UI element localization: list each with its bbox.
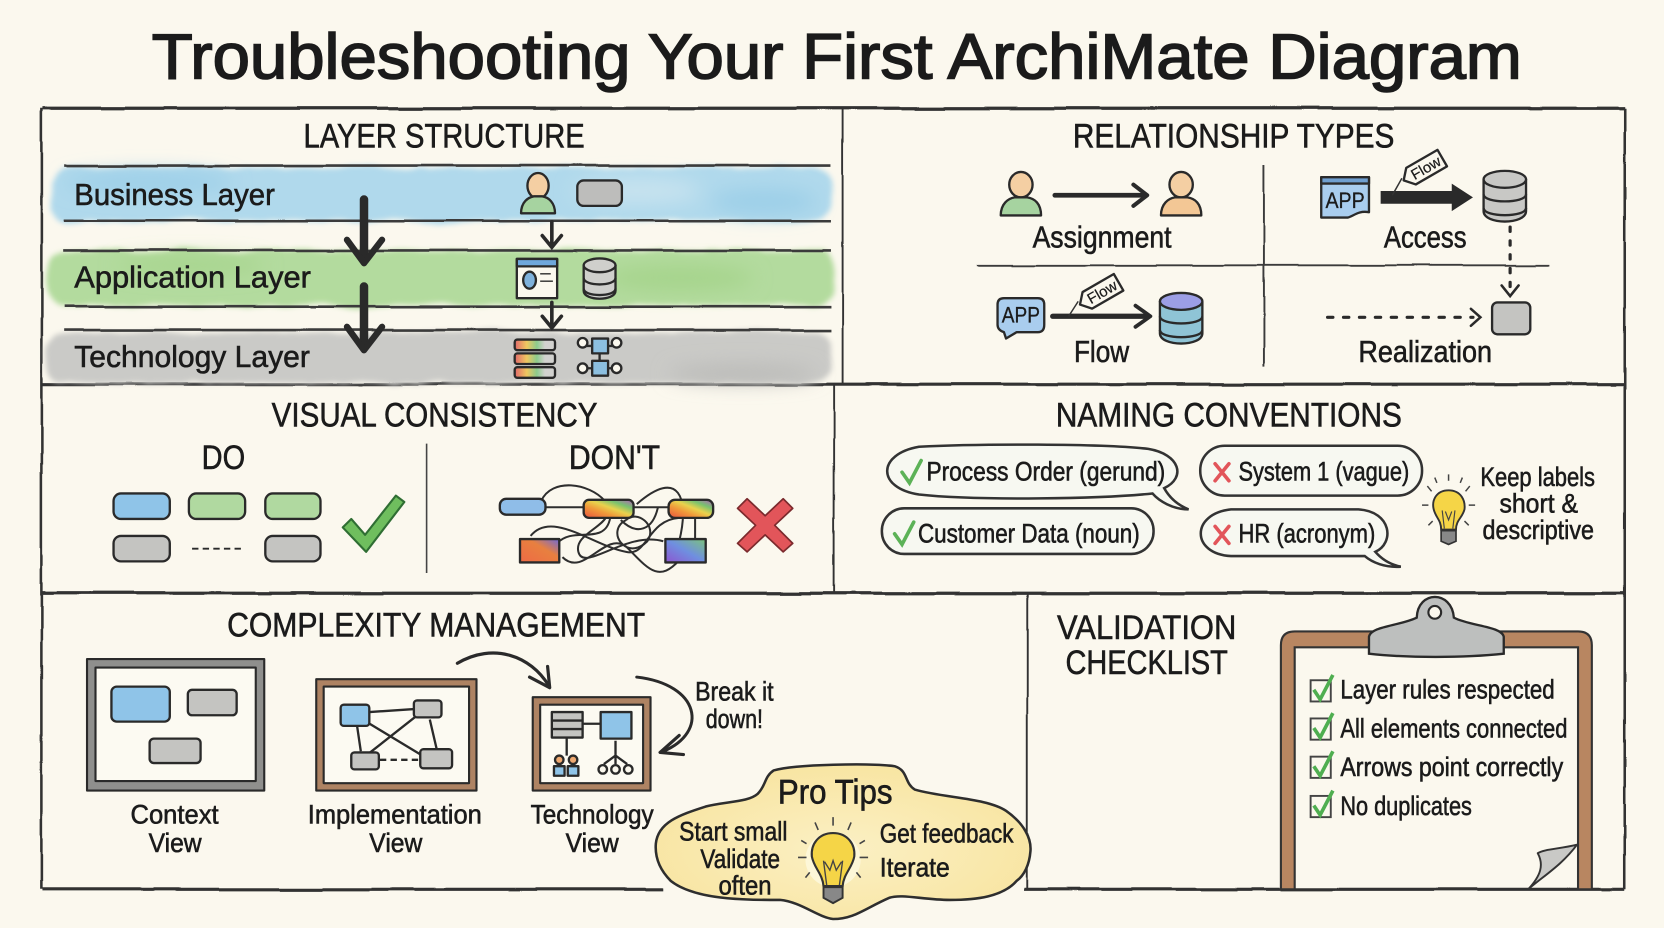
tips: left <box>679 816 787 901</box>
arrow: assignment <box>1055 185 1147 206</box>
icon: green check <box>343 496 404 552</box>
assignment relationship <box>1001 172 1201 254</box>
label: realization: Realization <box>1358 334 1492 369</box>
detail icons <box>552 712 632 776</box>
label: implementation view <box>308 800 482 858</box>
arrow: business detail <box>542 222 561 247</box>
label: technology layer: Technology Layer <box>74 339 310 374</box>
clip <box>1369 597 1504 657</box>
icon: gray box <box>1492 302 1530 334</box>
text: keep labels short and descriptive: descriptive <box>1483 515 1594 545</box>
arrow: implementation to technology <box>457 653 550 688</box>
label: implementation view: View <box>369 828 423 858</box>
tag: flow <box>1075 274 1123 313</box>
layer bands <box>47 166 834 383</box>
icon: check <box>895 522 914 544</box>
heading: layer structure: LAYER STRUCTURE <box>304 118 585 156</box>
callout: pro tips <box>656 764 1031 919</box>
panel: relationship types <box>976 118 1549 369</box>
text: keep labels short and descriptive <box>1480 462 1595 545</box>
icon: business actor <box>521 173 555 213</box>
access relationship: APP <box>1325 188 1365 213</box>
label: assignment: Assignment <box>1033 219 1172 254</box>
callout: hr: HR (acronym) <box>1238 518 1375 548</box>
heading: visual consistency: VISUAL CONSISTENCY <box>272 397 597 435</box>
tag: flow <box>1399 150 1447 189</box>
arrow: access <box>1381 184 1473 211</box>
clipboard <box>1281 597 1592 889</box>
tips: right: Iterate <box>880 853 950 883</box>
tag: flow: Flow <box>1085 278 1121 308</box>
panel: complexity management <box>87 607 774 858</box>
icon: application window <box>517 259 557 298</box>
tangled connectors <box>531 485 695 572</box>
arrow: dotted from database to box <box>1502 227 1519 296</box>
label: flow: Flow <box>1074 334 1130 369</box>
tips: left: often <box>718 871 772 901</box>
arrow: flow <box>1053 306 1150 327</box>
flow relationship: APP <box>1002 303 1040 328</box>
callout: process order: Process Order (gerund) <box>926 457 1165 487</box>
label: technology view: View <box>566 828 619 858</box>
label: context view: Context <box>131 800 219 830</box>
arrow: break it down <box>637 677 692 755</box>
text: keep labels short and descriptive: Keep labels <box>1480 462 1595 492</box>
callout: process order <box>887 445 1189 509</box>
item: all elements: All elements connected <box>1340 714 1567 744</box>
realization relationship <box>1328 227 1530 369</box>
arrow: realization <box>1328 309 1480 326</box>
panel: validation checklist <box>1057 597 1592 889</box>
label: technology view: Technology <box>531 800 654 830</box>
board <box>1281 631 1592 889</box>
heading: don't: DON'T <box>569 439 660 477</box>
icon: app bubble <box>998 298 1044 339</box>
icon: server stack <box>515 340 555 378</box>
label: business layer: Business Layer <box>74 177 275 212</box>
label: application layer: Application Layer <box>74 260 311 295</box>
label: context view: View <box>149 828 202 858</box>
icon: green person <box>1001 172 1041 215</box>
text: break it down: Break it <box>695 676 774 706</box>
callout: system 1 <box>1200 446 1422 496</box>
heading: validation checklist: VALIDATION <box>1057 609 1236 647</box>
label: implementation view: Implementation <box>308 800 482 830</box>
page curl <box>1528 845 1577 889</box>
icon: check <box>902 461 921 483</box>
heading: pro tips: Pro Tips <box>778 773 892 811</box>
label: access: Access <box>1384 219 1467 254</box>
item: layer rules: Layer rules respected <box>1340 674 1555 704</box>
tips: left: Validate <box>700 844 780 874</box>
implementation view <box>308 679 482 858</box>
icon: app window <box>1321 177 1369 218</box>
do column <box>114 439 404 561</box>
checklist items <box>1311 674 1567 821</box>
heading: naming conventions: NAMING CONVENTIONS <box>1056 397 1402 435</box>
consistent boxes <box>114 493 320 561</box>
frame <box>316 679 476 791</box>
heading: validation checklist: CHECKLIST <box>1065 644 1228 682</box>
tips: right <box>880 819 1014 883</box>
icon: business process box <box>577 180 622 206</box>
arrow: business to application <box>347 200 382 263</box>
arrow: application detail <box>542 302 561 328</box>
cloud <box>656 764 1031 919</box>
label: technology view <box>531 800 654 858</box>
technology view <box>531 697 654 858</box>
icon: blue database <box>1160 293 1202 344</box>
icon: light bulb <box>1422 474 1475 544</box>
frame <box>87 659 264 791</box>
text: break it down: down! <box>706 704 763 734</box>
icon: red cross <box>738 499 793 552</box>
callout: system 1: System 1 (vague) <box>1238 457 1409 487</box>
boxes <box>111 687 237 763</box>
label: context view <box>131 800 219 858</box>
icon: light bulb <box>798 817 868 903</box>
tag: flow: Flow <box>1409 154 1444 184</box>
tips: left: Start small <box>679 816 787 846</box>
context view <box>87 659 264 858</box>
icon: cross <box>1215 526 1229 543</box>
panel: visual consistency <box>114 397 793 573</box>
panel: naming conventions <box>882 397 1595 567</box>
arrow: application to technology <box>347 287 382 350</box>
text: break it down <box>695 676 774 734</box>
flow relationship <box>998 274 1202 369</box>
icon: orange person <box>1161 172 1201 215</box>
heading: do: DO <box>202 439 245 477</box>
title: Troubleshooting Your First ArchiMate Diagram <box>152 22 1522 93</box>
heading: validation checklist <box>1057 609 1236 682</box>
tips: right: Get feedback <box>880 819 1014 849</box>
access relationship <box>1321 150 1526 254</box>
text: keep labels short and descriptive: short & <box>1500 489 1578 519</box>
messy boxes <box>500 499 713 562</box>
callout: customer data: Customer Data (noun) <box>918 518 1140 548</box>
heading: complexity management: COMPLEXITY MANAGEMENT <box>227 607 645 645</box>
connected nodes <box>341 700 452 769</box>
frame <box>533 697 651 791</box>
callout: hr <box>1201 509 1401 567</box>
item: no duplicates: No duplicates <box>1340 791 1472 821</box>
callout: customer data <box>882 508 1154 554</box>
icon: cross <box>1215 464 1229 481</box>
icon: network nodes <box>578 338 621 376</box>
heading: relationship types: RELATIONSHIP TYPES <box>1073 118 1394 156</box>
panel: layer structure <box>47 118 834 383</box>
icon: application database <box>584 258 616 299</box>
item: no duplicates <box>1311 791 1472 821</box>
item: arrows: Arrows point correctly <box>1340 752 1564 782</box>
don't column <box>500 439 793 572</box>
icon: gray database <box>1484 171 1526 222</box>
